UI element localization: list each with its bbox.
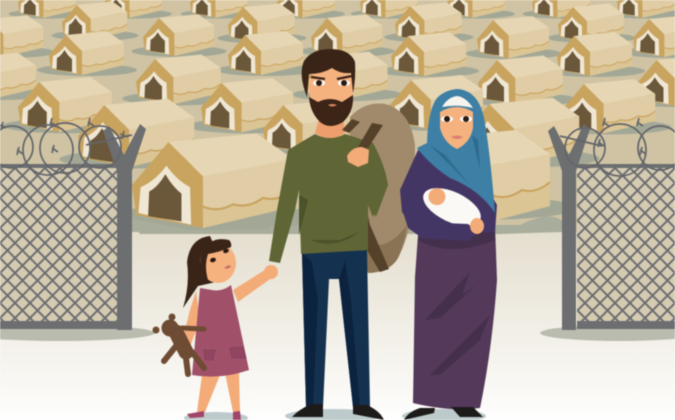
hijab [417,89,495,213]
dress [192,285,249,377]
man beard [309,95,353,126]
foot shadows [184,409,486,420]
robe [413,225,497,409]
left fence [0,118,155,341]
bag [350,104,415,273]
bear [154,315,204,374]
arms [180,268,273,352]
strap upper [342,119,383,148]
woman hand [470,218,484,234]
hand on strap [347,147,369,167]
shoes [292,404,384,420]
forearm sleeve [403,212,478,241]
man eyes, brows, mouth [311,76,352,106]
ground shadow band [128,218,562,234]
woman with baby [400,89,497,420]
hair back [183,236,228,308]
background: foreground ground [0,232,675,420]
man hair [302,49,355,97]
baby [418,180,486,234]
man face [309,61,353,115]
neck [315,115,345,138]
shoes [187,411,241,420]
man with bag [269,49,415,420]
tent rows [0,0,675,232]
girl with teddy bear [154,236,278,420]
upper robe [400,150,497,236]
hand [264,265,278,279]
strap lower [350,170,389,272]
girl hair front [200,239,231,282]
dress pockets [204,347,246,360]
background: camp ground [0,0,675,236]
right fence [540,118,675,341]
girl face [200,243,236,283]
legs [197,372,240,412]
trousers [302,250,370,407]
shoes [404,407,483,420]
woman face [440,107,473,149]
girl eyes and mouth [209,248,231,269]
white under-cap [442,96,473,108]
shirt and arms [269,134,388,263]
